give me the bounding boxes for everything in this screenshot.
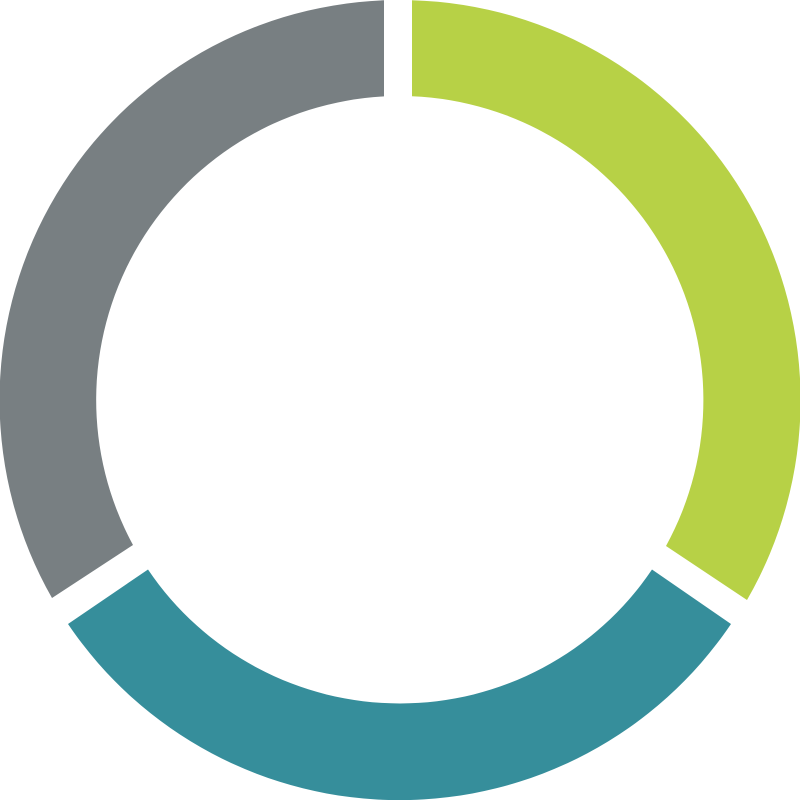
segment: gray	[0, 0, 384, 598]
segment: green	[412, 0, 800, 600]
segment: teal	[68, 570, 731, 800]
